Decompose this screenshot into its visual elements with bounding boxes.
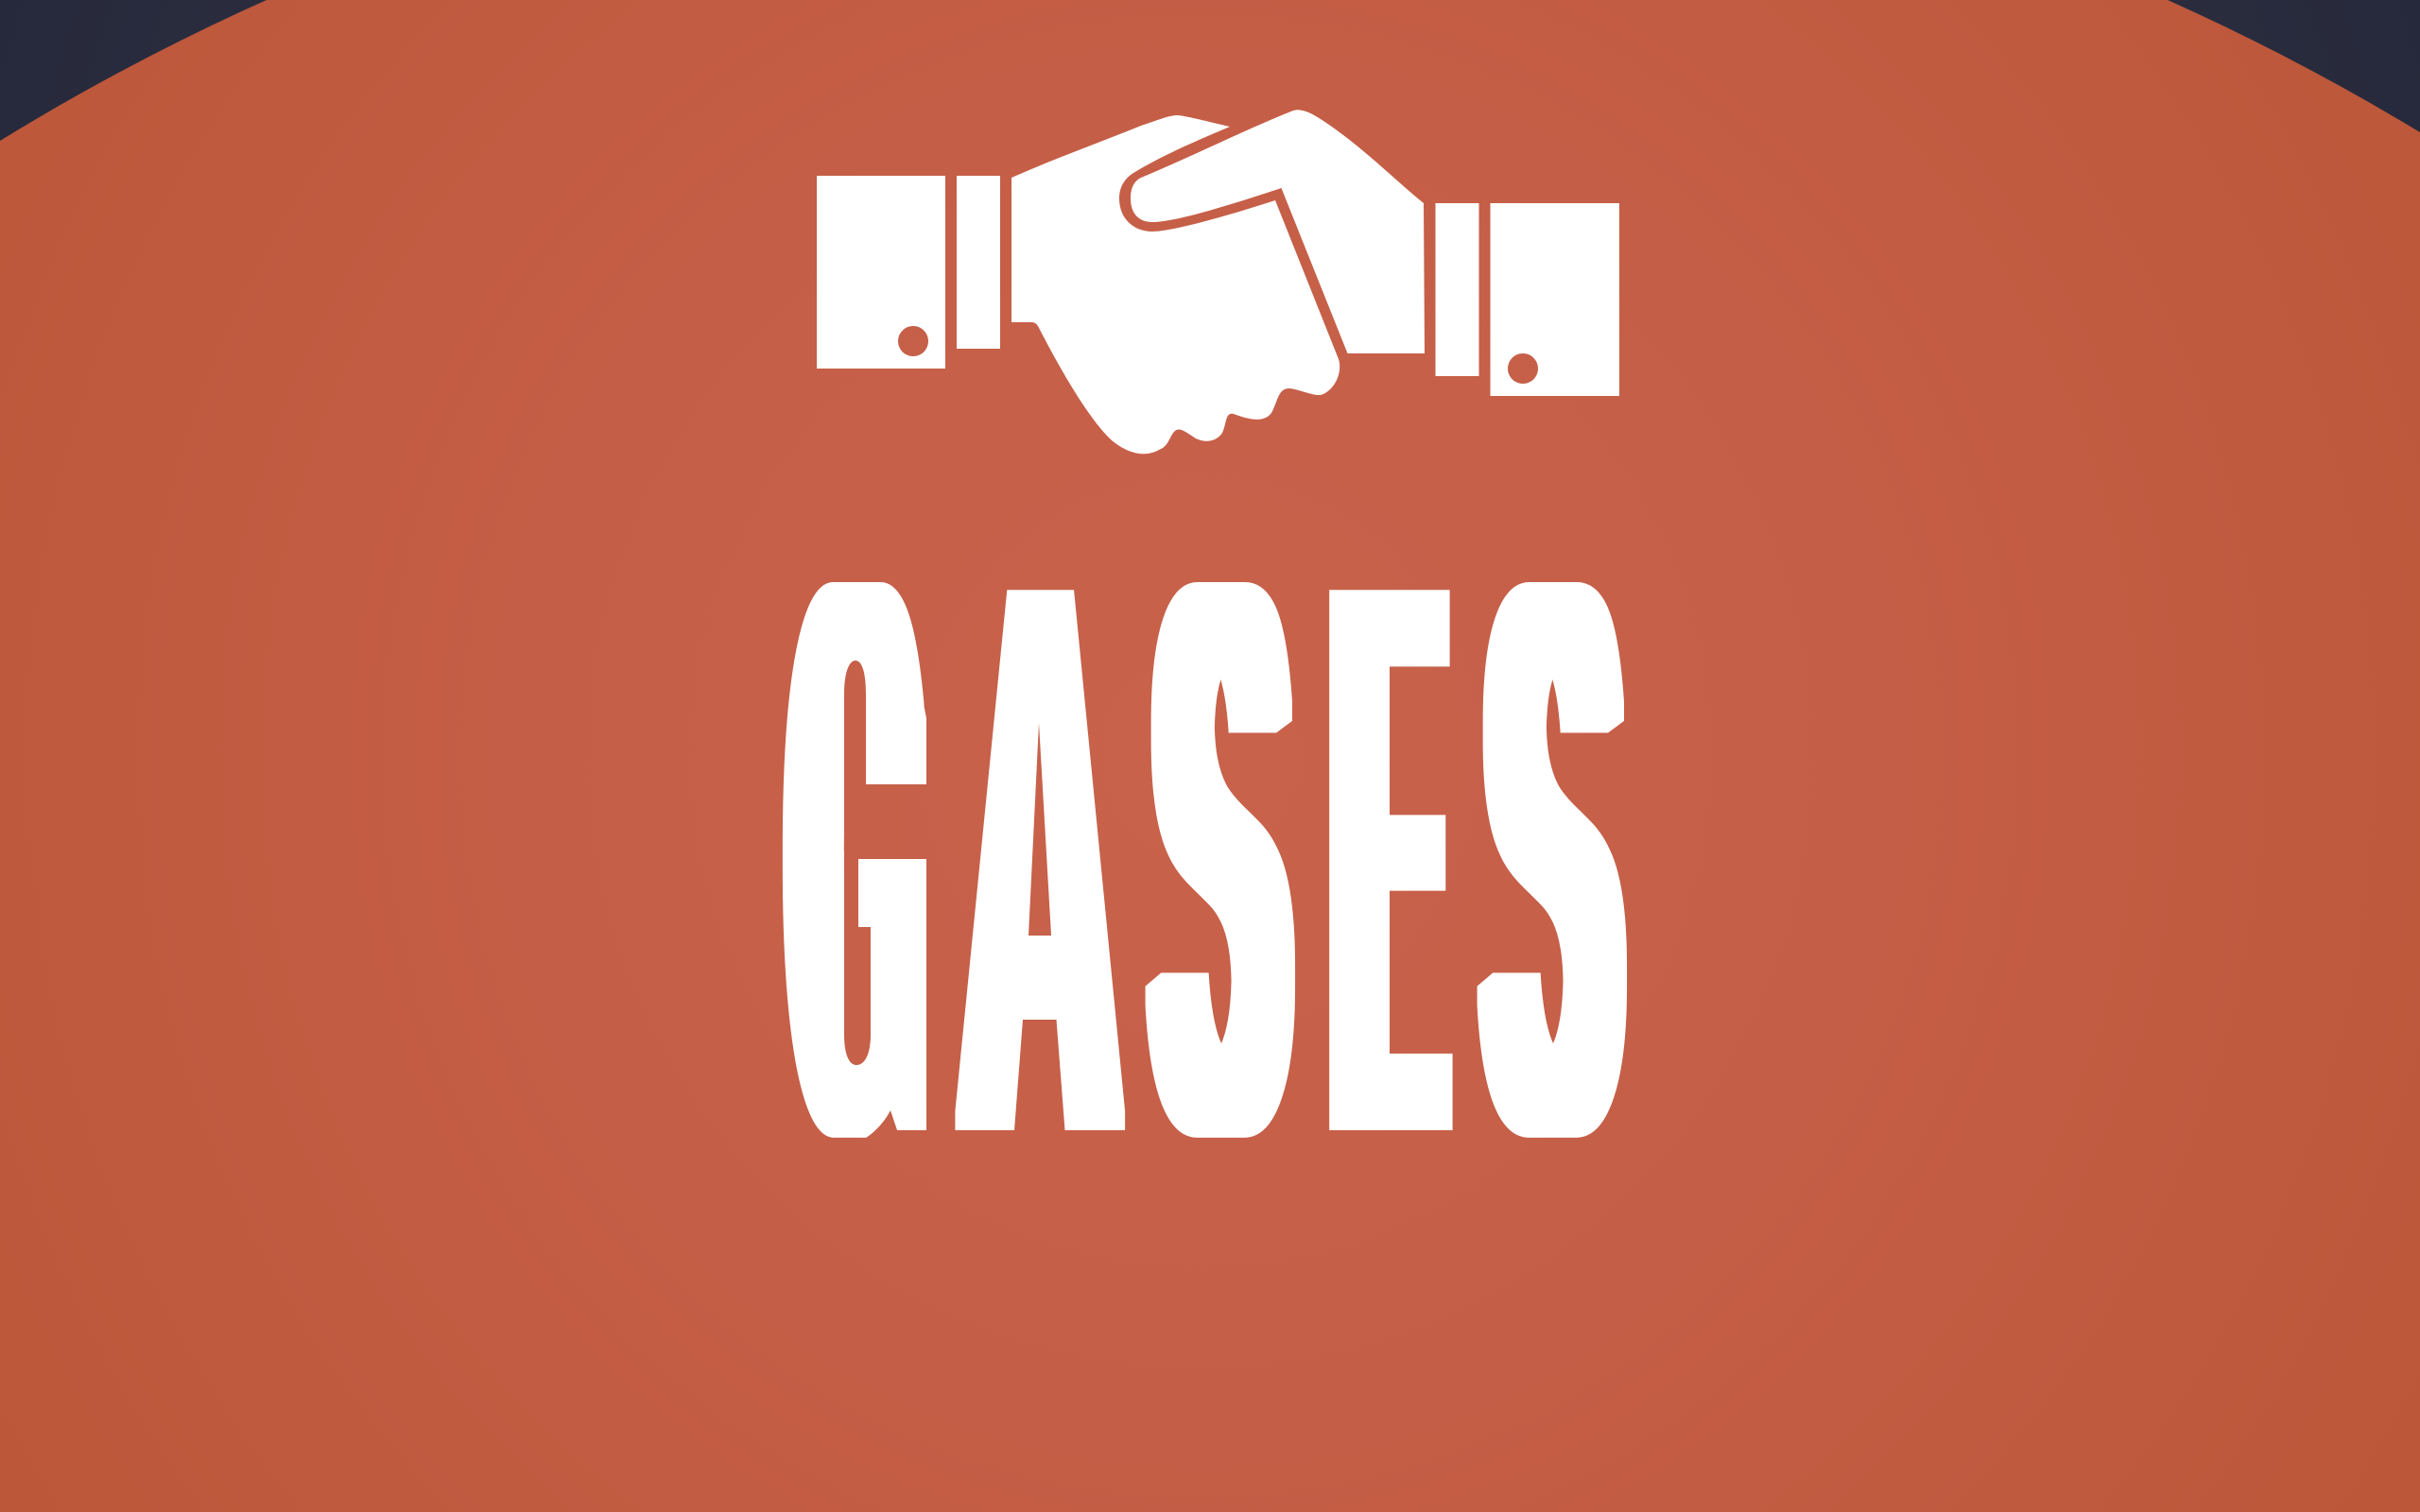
icon: right cuff xyxy=(1490,203,1619,396)
icon: handshake xyxy=(817,110,1619,454)
icon: left cuff xyxy=(817,176,945,369)
title: GASES xyxy=(783,567,1628,1153)
icon: right sleeve band xyxy=(1435,203,1478,376)
icon: left hand xyxy=(1011,115,1340,454)
icon: right hand xyxy=(1131,110,1425,353)
icon: left sleeve band xyxy=(957,176,1000,349)
